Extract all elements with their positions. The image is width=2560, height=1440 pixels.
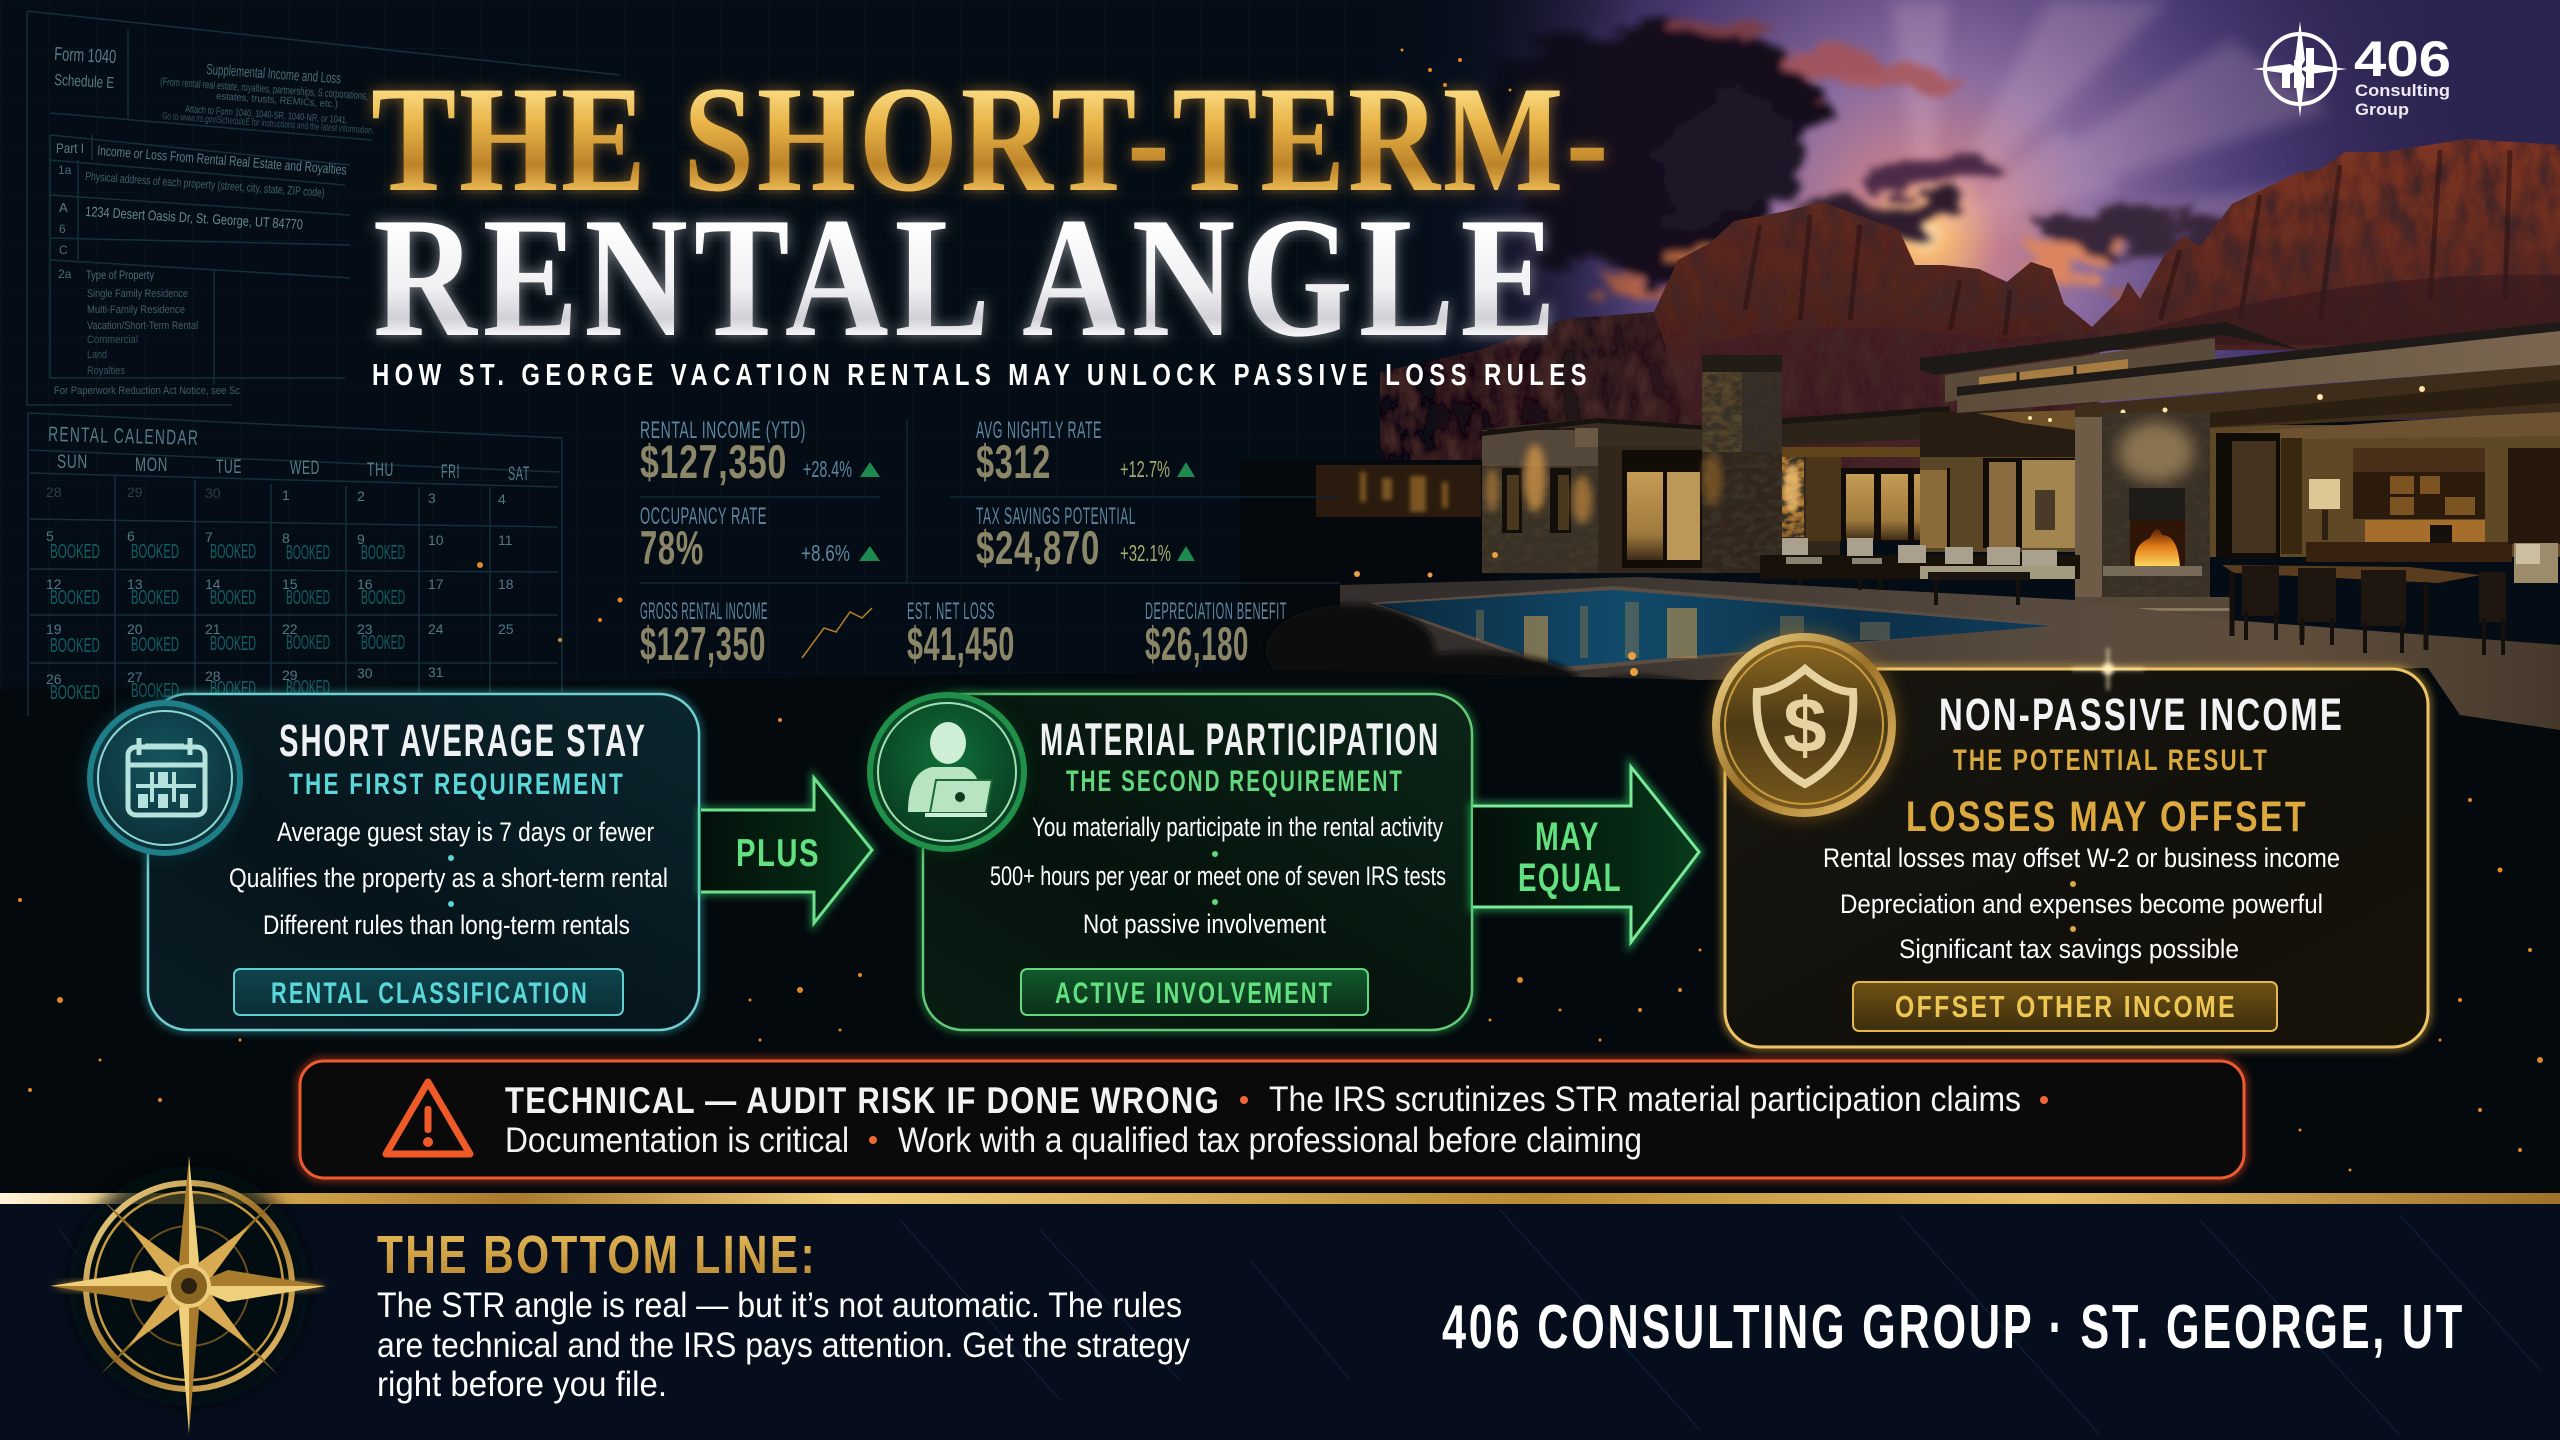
- body: The STR angle is real — but it’s not automatic. The rules: [377, 1286, 1182, 1325]
- stat: tax savings: +32.1%: [1120, 540, 1171, 566]
- stat: tax savings: $24,870: [976, 521, 1100, 574]
- sparkle: [2072, 648, 2144, 690]
- bullet list: Not passive involvement: [1083, 909, 1326, 939]
- icon: gold compass: [50, 1156, 326, 1434]
- ghost: rental calendar: BOOKED: [50, 587, 100, 609]
- mountain: talus slopes: [1690, 328, 2100, 420]
- ghost: rental calendar: TUE: [216, 457, 242, 478]
- ghost: rental calendar: 3: [428, 490, 436, 506]
- mountain: central butte: [1654, 202, 2100, 420]
- ghost: rental calendar: 24: [428, 621, 444, 637]
- subtitle: HOW ST. GEORGE VACATION RENTALS MAY UNLOCK PASSIVE LOSS RULES: [372, 357, 1592, 392]
- ghost: rental calendar: FRI: [441, 462, 460, 483]
- garden lights: [1354, 552, 1638, 676]
- background: dark fade over sky: [1380, 0, 1640, 445]
- ghost: rental calendar: 31: [428, 664, 444, 680]
- ghost: schedule E tax form: For Paperwork Reduction Act Notice, see Sc: [54, 385, 240, 397]
- stat: tax savings: TAX SAVINGS POTENTIAL: [976, 503, 1136, 530]
- bullet list: Rental losses may offset W-2 or business income: [1823, 843, 2340, 873]
- ghost: rental calendar: 28: [46, 484, 62, 500]
- ghost: stats dashboard: [640, 417, 1340, 670]
- ghost: schedule E tax form: 2a: [58, 267, 72, 281]
- ghost: rental calendar: BOOKED: [286, 542, 330, 564]
- ghost: schedule E tax form: A: [59, 200, 68, 215]
- body: right before you file.: [377, 1365, 667, 1404]
- tag: [1021, 969, 1368, 1015]
- house: fireplace column: [2075, 413, 2230, 623]
- warning text: Work with a qualified tax professional before claiming: [898, 1121, 1642, 1160]
- panel: material participation: [867, 692, 1472, 1030]
- tag: [234, 969, 623, 1015]
- ghost: rental calendar: 29: [127, 484, 143, 500]
- logo: 406 Consulting Group: Consulting: [2355, 81, 2450, 100]
- subheading: THE POTENTIAL RESULT: [1953, 744, 2269, 777]
- house: right-side wing: [1920, 410, 2080, 552]
- patio floor: [1340, 577, 2560, 732]
- ghost: rental calendar: 30: [357, 665, 373, 681]
- shrubs: [1265, 604, 1710, 724]
- ghost: rental calendar: 16: [357, 576, 373, 592]
- ghost: rental calendar: 1: [282, 487, 290, 503]
- stat: net loss: $41,450: [907, 617, 1015, 670]
- ghost: rental calendar: 25: [498, 621, 514, 637]
- ghost: rental calendar: 14: [205, 576, 221, 592]
- panel: non-passive income: [1710, 631, 2428, 1047]
- logo: 406 Consulting Group: 406: [2354, 31, 2451, 87]
- house: low roofs: [1482, 406, 1950, 457]
- pool: [1370, 586, 2058, 672]
- stat: depreciation: [1145, 598, 1287, 670]
- panel: audit risk warning: [300, 1061, 2244, 1178]
- house: right interior: [2210, 410, 2560, 583]
- title: line one: THE SHORT-TERM-: [371, 55, 1611, 223]
- house: main fascia and soffit: [1957, 322, 2560, 428]
- ghost: schedule E tax form: Supplemental Income and Loss: [206, 61, 342, 87]
- ghost: rental calendar: 26: [46, 671, 62, 687]
- stat: nightly rate: $312: [976, 435, 1051, 488]
- ghost: rental calendar: BOOKED: [361, 632, 405, 654]
- ghost: rental calendar: BOOKED: [131, 587, 179, 609]
- ghost: rental calendar: BOOKED: [286, 677, 330, 699]
- stat: nightly rate: [976, 417, 1195, 488]
- ghost: stats dashboard: DEPRECIATION BENEFIT: [1145, 598, 1287, 625]
- ghost: rental calendar: BOOKED: [286, 632, 330, 654]
- ghost: rental calendar: 11: [498, 532, 513, 548]
- ghost: schedule E tax form: Schedule E: [54, 72, 115, 92]
- ghost: rental calendar: 13: [127, 576, 143, 592]
- arrow: may equal: EQUAL: [1518, 856, 1622, 900]
- logo compass mark: [2253, 21, 2347, 117]
- ghost: rental calendar: 4: [498, 491, 506, 507]
- stat: nightly rate: AVG NIGHTLY RATE: [976, 417, 1102, 444]
- ghost: schedule E tax form: Income or Loss From Rental Real Estate and Royalties: [97, 142, 347, 178]
- ghost: rental calendar: 5: [46, 528, 54, 544]
- panel: bottom line footer: [0, 1193, 2560, 1440]
- ghost: rental calendar: BOOKED: [131, 634, 179, 656]
- subheading: THE FIRST REQUIREMENT: [289, 768, 625, 801]
- tag: [1853, 982, 2277, 1031]
- ghost: rental calendar: BOOKED: [361, 542, 405, 564]
- ghost: rental calendar: RENTAL CALENDAR: [48, 423, 199, 450]
- callout: losses may offset: LOSSES MAY OFFSET: [1906, 793, 2308, 841]
- ghost: schedule E tax form: Vacation/Short-Term Rental: [87, 320, 198, 332]
- ghost: schedule E tax form: Part I: [56, 140, 84, 156]
- ghost: rental calendar: THU: [367, 460, 394, 481]
- warning text: Documentation is critical: [505, 1121, 849, 1160]
- furniture: lounge: [1760, 538, 2080, 605]
- tag: RENTAL CLASSIFICATION: [271, 977, 589, 1010]
- sky: [1380, 0, 2560, 420]
- bullet list: Average guest stay is 7 days or fewer: [277, 817, 654, 847]
- mountain: right cliff: [2092, 139, 2560, 350]
- ghost: rental calendar: WED: [290, 458, 320, 479]
- stat: rental income: RENTAL INCOME (YTD): [640, 417, 806, 444]
- ghost: rental calendar: 27: [127, 669, 143, 685]
- ghost: schedule E tax form: estates, trusts, REMICs, etc.): [216, 91, 338, 111]
- stat: rental income: $127,350: [640, 435, 787, 488]
- subheading: THE SECOND REQUIREMENT: [1066, 765, 1404, 798]
- ghost: rental calendar: BOOKED: [210, 678, 256, 700]
- arrow: plus: [701, 778, 872, 923]
- stat: rental income: +28.4%: [803, 456, 852, 482]
- heading: NON-PASSIVE INCOME: [1939, 689, 2344, 740]
- ghost: rental calendar: BOOKED: [286, 587, 330, 609]
- ghost: stats dashboard: GROSS RENTAL INCOME: [640, 598, 768, 625]
- bullet list: Significant tax savings possible: [1899, 934, 2239, 964]
- ghost: schedule E tax form: 1234 Desert Oasis Dr, St. George, UT 84770: [85, 203, 304, 232]
- ghost: rental calendar: 18: [498, 576, 514, 592]
- house: top clerestory: [1920, 322, 2300, 402]
- ghost: rental calendar: 7: [205, 529, 213, 545]
- heading: THE BOTTOM LINE:: [377, 1225, 817, 1285]
- ghost: rental calendar: 23: [357, 621, 373, 637]
- stat: occupancy: +8.6%: [801, 540, 850, 566]
- icon: shield with dollar: [1710, 631, 1898, 819]
- arrow: may equal: [1473, 767, 1699, 942]
- clouds: [1475, 18, 2242, 298]
- ghost: schedule E tax form: Commercial: [87, 334, 138, 346]
- bullet list: [990, 812, 1446, 939]
- ghost: schedule E tax form: C: [59, 243, 68, 257]
- warning text: [505, 1080, 2048, 1160]
- background: tech grid: [0, 0, 1500, 690]
- stat: gross rental income: $127,350: [640, 617, 766, 670]
- ghost: rental calendar: 28: [205, 668, 221, 684]
- arrow: may equal: MAY: [1535, 815, 1600, 859]
- mountain: rear hill: [1380, 310, 2000, 470]
- logo: 406 Consulting Group: Group: [2355, 100, 2409, 119]
- warning text: The IRS scrutinizes STR material participation claims: [1269, 1080, 2021, 1119]
- ghost: schedule E tax form: Go to www.irs.gov/ScheduleE for instructions and the latest information.: [162, 111, 374, 137]
- warning text: TECHNICAL — AUDIT RISK IF DONE WRONG: [505, 1080, 1220, 1121]
- bullet list: [229, 817, 668, 940]
- logo: 406 Consulting Group: [2253, 21, 2451, 119]
- scene: desert house at dusk: [1240, 0, 2560, 732]
- bullet list: [1823, 843, 2340, 964]
- house: distant wing: [1316, 465, 1481, 517]
- ghost: schedule E tax form: 1a: [58, 163, 72, 177]
- ghost: rental calendar: 20: [127, 621, 143, 637]
- ghost: rental calendar: 30: [205, 485, 221, 501]
- ghost: rental calendar: BOOKED: [361, 587, 405, 609]
- body: [377, 1286, 1190, 1404]
- bullet list: Qualifies the property as a short-term rental: [229, 863, 668, 893]
- tag: OFFSET OTHER INCOME: [1895, 989, 2237, 1024]
- title: line two: RENTAL ANGLE: [373, 183, 1562, 373]
- ghost: rental calendar: 21: [205, 621, 221, 637]
- house: middle wall and door: [1598, 447, 1941, 573]
- stat: depreciation: $26,180: [1145, 617, 1249, 670]
- house: chimney: [1702, 355, 1782, 452]
- ghost: rental calendar: BOOKED: [210, 633, 256, 655]
- ghost: rental calendar: BOOKED: [210, 541, 256, 563]
- ghost: rental calendar: 22: [282, 621, 298, 637]
- bullet list: Depreciation and expenses become powerful: [1840, 889, 2323, 919]
- heading: SHORT AVERAGE STAY: [279, 715, 647, 766]
- icon: shield with dollar: $: [1783, 681, 1827, 769]
- ghost: rental calendar: BOOKED: [50, 635, 100, 657]
- stat: rental income: [640, 417, 880, 488]
- tag: ACTIVE INVOLVEMENT: [1055, 977, 1334, 1010]
- panel: short average stay: [85, 694, 699, 1030]
- stat: tax savings: [976, 503, 1195, 574]
- ghost: rental calendar: 10: [428, 532, 444, 548]
- embers: [18, 48, 2543, 1172]
- ghost: rental calendar: BOOKED: [131, 680, 179, 702]
- ghost: rental calendar: BOOKED: [50, 541, 100, 563]
- sparkline: [802, 608, 872, 658]
- ghost: schedule E tax form: [27, 11, 620, 405]
- background: lower dark band: [0, 668, 2560, 1200]
- ghost: schedule E tax form: Form 1040: [54, 44, 117, 68]
- bullet list: Different rules than long-term rentals: [263, 910, 630, 940]
- furniture: dining: [2222, 565, 2506, 655]
- mountain detail strata: [1745, 150, 2510, 335]
- body: are technical and the IRS pays attention. Get the strategy: [377, 1326, 1190, 1365]
- stat: occupancy: [640, 503, 880, 574]
- stat: occupancy: 78%: [640, 521, 704, 574]
- ghost: rental calendar: 19: [46, 621, 62, 637]
- sun rays: [1890, 0, 2420, 236]
- ghost: schedule E tax form: 6: [59, 222, 66, 236]
- ghost: rental calendar: SAT: [508, 464, 530, 485]
- background: garden darkness: [1240, 460, 1500, 670]
- bullet list: You materially participate in the rental activity: [1032, 812, 1443, 842]
- ghost: rental calendar: [28, 413, 562, 716]
- ghost: rental calendar: SUN: [57, 452, 88, 473]
- ghost: rental calendar: 17: [428, 576, 444, 592]
- ghost: schedule E tax form: Land: [87, 349, 107, 361]
- ghost: rental calendar: 8: [282, 530, 290, 546]
- ghost: schedule E tax form: (From rental real estate, royalties, partnerships, S corporations,: [160, 76, 368, 103]
- stat: occupancy: OCCUPANCY RATE: [640, 503, 767, 530]
- ghost: rental calendar: BOOKED: [50, 682, 100, 704]
- ghost: schedule E tax form: Type of Property: [86, 268, 154, 282]
- house: left stone wing: [1482, 430, 1598, 573]
- ghost: schedule E tax form: Multi-Family Residence: [87, 304, 185, 316]
- bullet list: 500+ hours per year or meet one of seven IRS tests: [990, 861, 1446, 891]
- ghost: schedule E tax form: Attach to Form 1040, 1040-SR, 1040-NR, or 1041.: [185, 104, 348, 126]
- ghost: schedule E tax form: Physical address of each property (street, city, state, ZIP code): [85, 169, 325, 200]
- arrow: plus: PLUS: [736, 832, 820, 875]
- ghost: rental calendar: 6: [127, 528, 135, 544]
- stat: net loss: EST. NET LOSS: [907, 598, 995, 625]
- ghost: rental calendar: 12: [46, 576, 62, 592]
- ghost: rental calendar: MON: [135, 455, 168, 476]
- ghost: rental calendar: BOOKED: [131, 541, 179, 563]
- stat: gross rental income: [640, 598, 768, 670]
- icon: warning triangle: [386, 1082, 470, 1154]
- ghost: rental calendar: 15: [282, 576, 298, 592]
- ghost: rental calendar: BOOKED: [210, 587, 256, 609]
- ghost: rental calendar: 9: [357, 531, 365, 547]
- stat: net loss: [907, 598, 1015, 670]
- icon: person at laptop: [867, 692, 1027, 852]
- ghost: schedule E tax form: Single Family Residence: [87, 288, 188, 300]
- ghost: rental calendar: 29: [282, 667, 298, 683]
- ghost: schedule E tax form: Royalties: [87, 365, 125, 377]
- stat: nightly rate: +12.7%: [1120, 456, 1170, 482]
- heading: MATERIAL PARTICIPATION: [1040, 714, 1440, 765]
- icon: calendar: [85, 698, 245, 858]
- ghost: rental calendar: 2: [357, 488, 365, 504]
